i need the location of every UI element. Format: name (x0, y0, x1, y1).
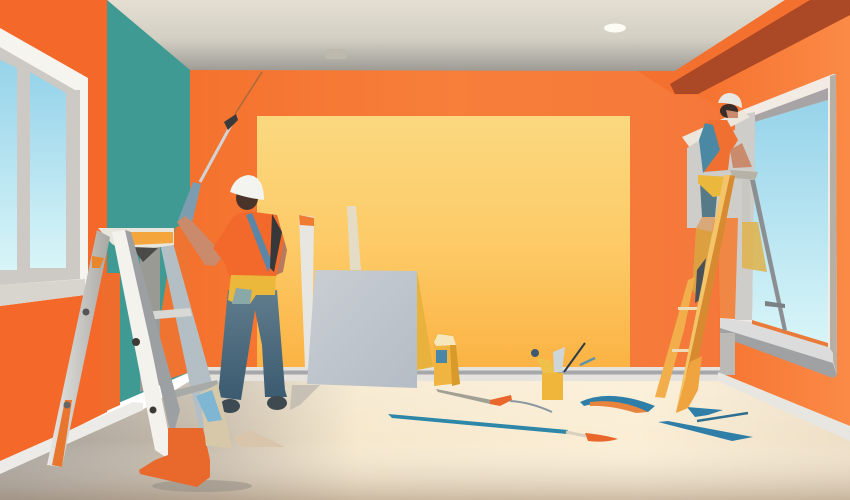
leaning strips behind board (299, 206, 361, 368)
raised arm (177, 216, 227, 266)
baseboards (190, 367, 850, 442)
ceiling light (604, 24, 626, 32)
right window (682, 74, 837, 378)
head (236, 186, 258, 210)
left wall: orange section (0, 0, 107, 465)
hard hat (230, 175, 264, 200)
gray drywall board (307, 270, 433, 388)
bent tool on floor (580, 396, 655, 413)
scraper tool on floor (436, 389, 552, 412)
yellow drywall panel (257, 116, 630, 367)
rear leg and steps (160, 243, 230, 447)
body (703, 120, 738, 172)
head (720, 104, 738, 118)
left wall: teal section (102, 0, 190, 413)
raised tool pole (177, 72, 262, 223)
yellow ladder rails (655, 277, 695, 398)
center front leg (112, 230, 170, 460)
legs (218, 290, 287, 400)
left stepladder (47, 228, 285, 492)
top cap (98, 228, 174, 252)
long blue trowel with handle (388, 414, 618, 442)
pillar (735, 112, 755, 320)
right ladder (655, 170, 787, 413)
ceiling soffit beam (638, 0, 810, 95)
tool caddy (531, 343, 595, 400)
orange shirt (213, 211, 284, 277)
floor (0, 381, 850, 500)
back wall (190, 70, 720, 376)
ceiling (0, 0, 850, 130)
joint compound carton (434, 333, 460, 386)
left window (0, 28, 88, 306)
tool belt (228, 275, 276, 304)
right wall (638, 0, 850, 426)
left front leg (47, 230, 110, 467)
ceiling vent (326, 49, 346, 59)
right arm (274, 215, 287, 276)
worker with drywall tool (177, 72, 287, 413)
worker on right ladder (692, 93, 752, 303)
small blue tools (658, 407, 753, 441)
paper on floor (233, 430, 285, 447)
orange floor block (152, 480, 252, 492)
window sill (720, 318, 833, 365)
suspenders (246, 213, 272, 272)
boots (220, 399, 240, 413)
paint can by ladder (200, 384, 232, 448)
